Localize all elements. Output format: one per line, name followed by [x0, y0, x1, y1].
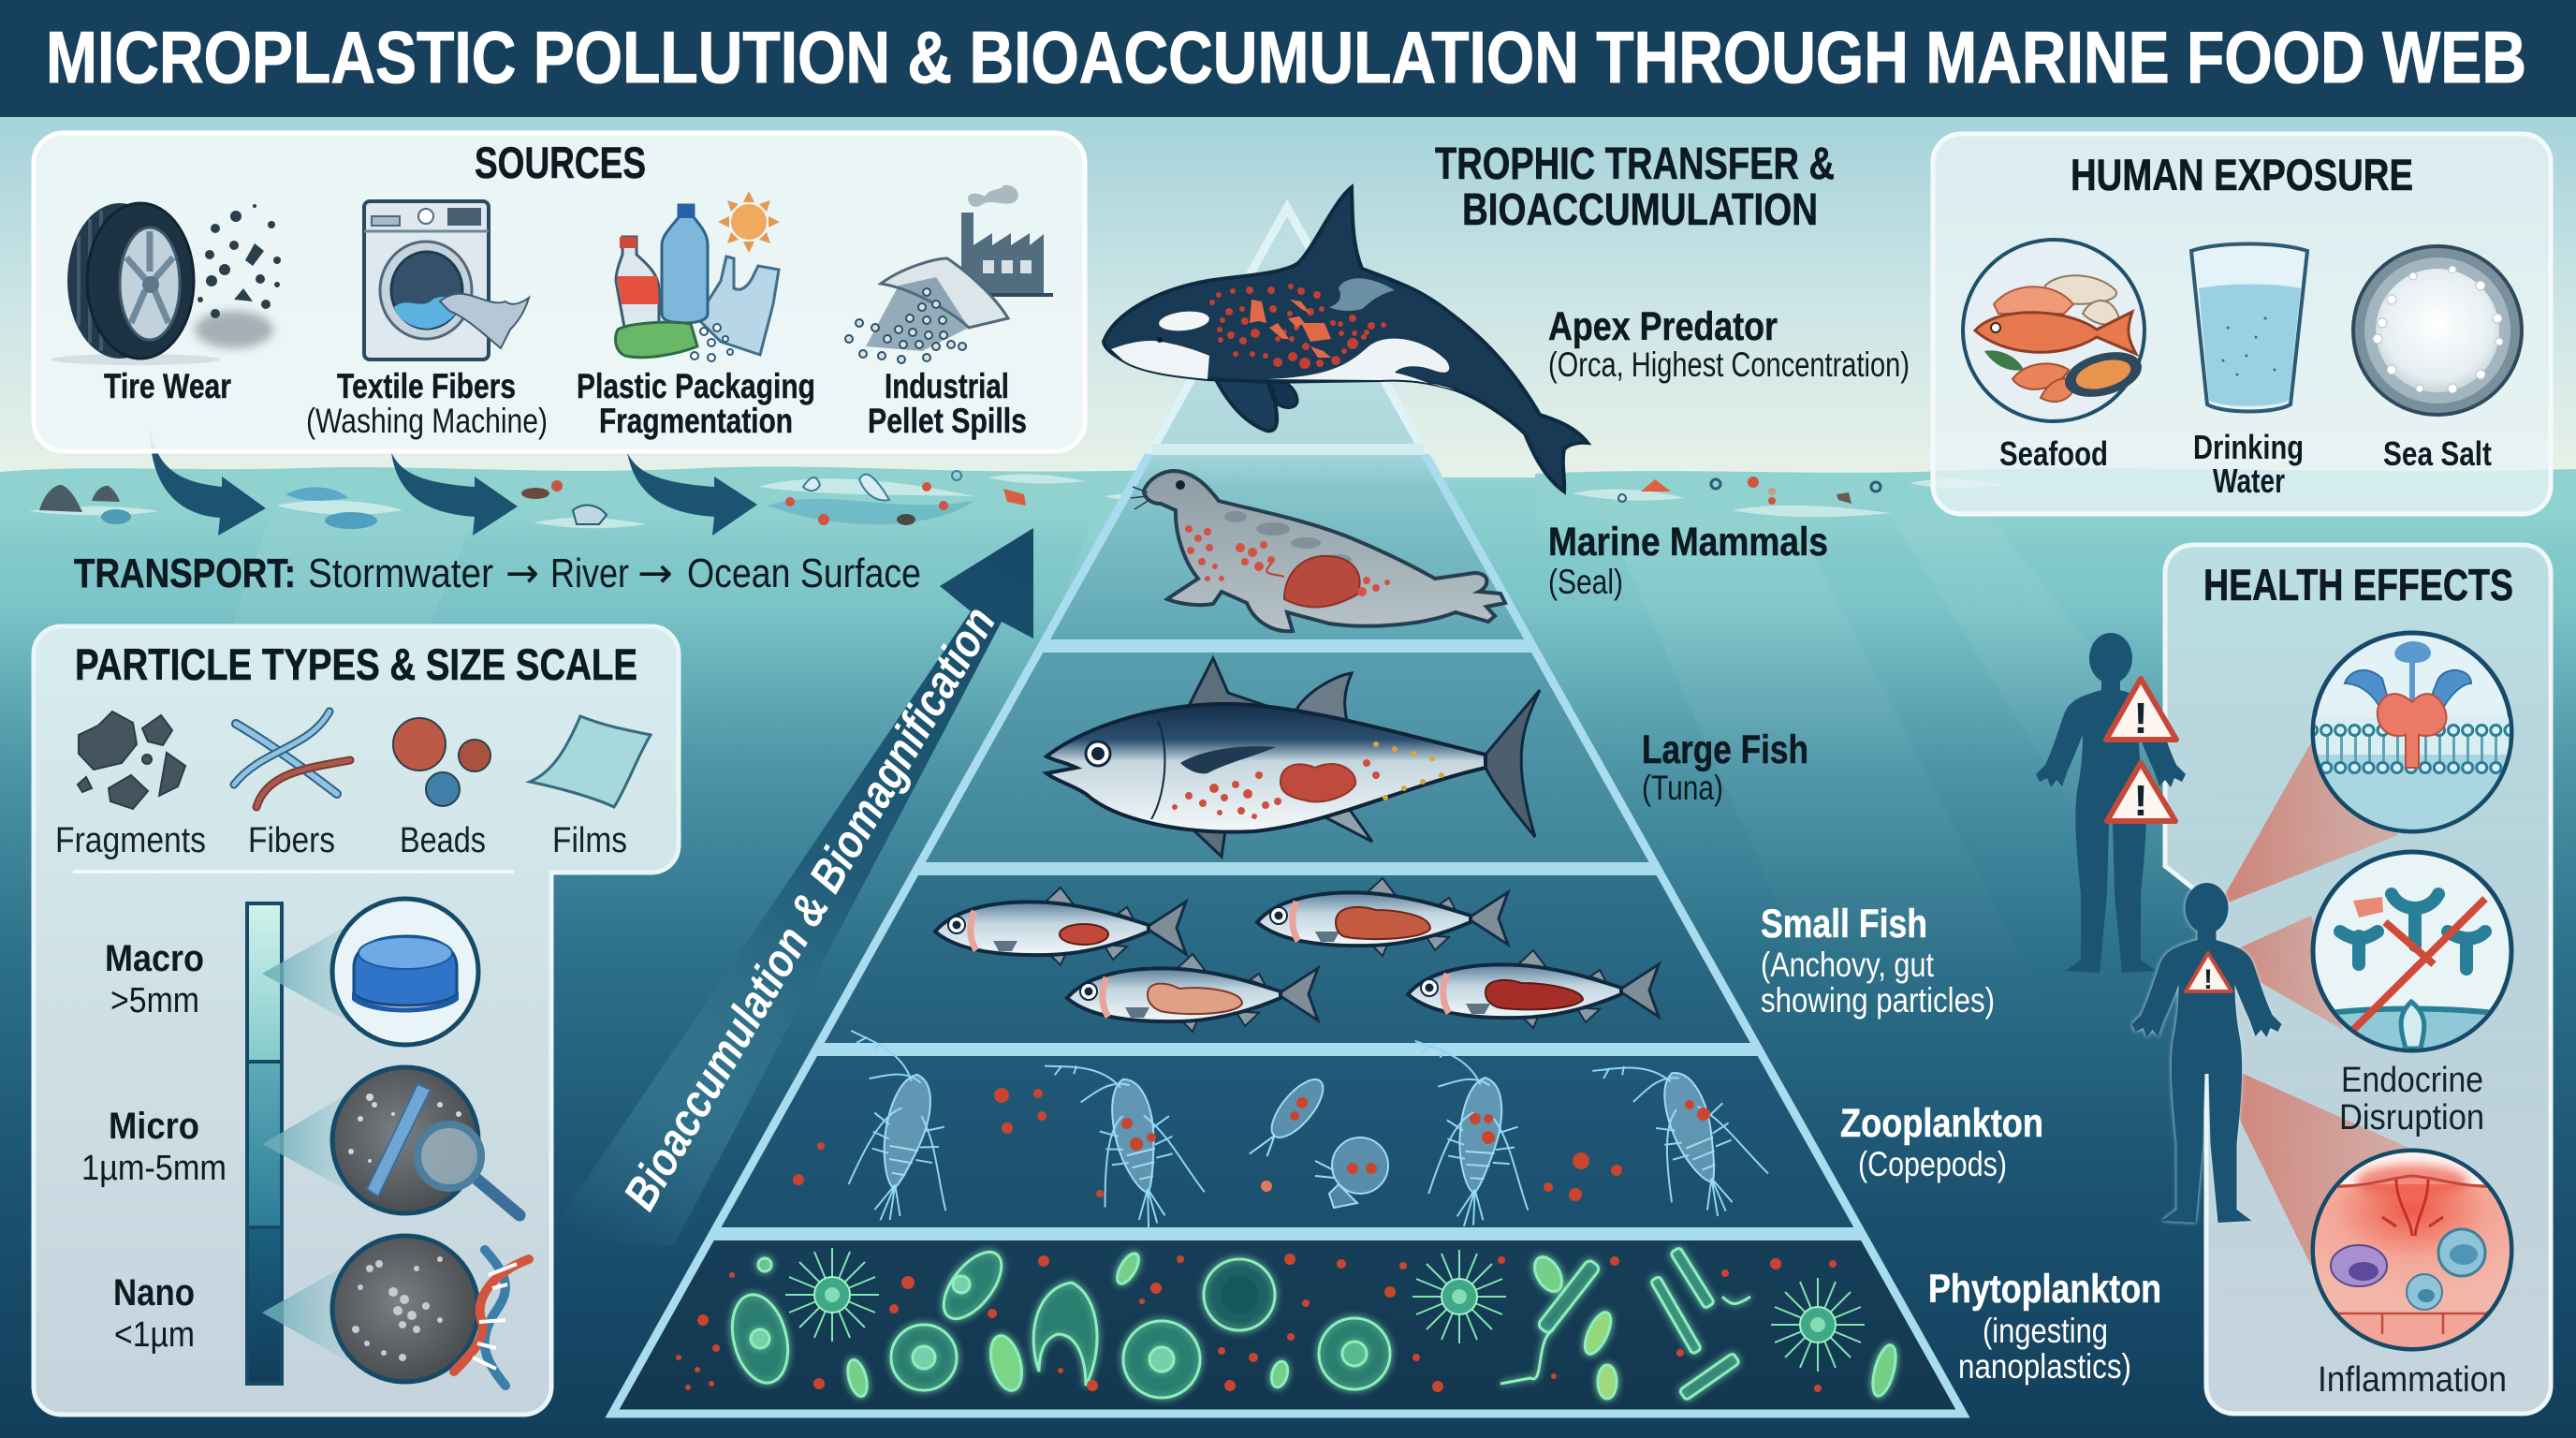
label: drinking water: Drinking: [2193, 428, 2304, 466]
label: textile fibers: Textile Fibers: [337, 367, 516, 405]
light rays in water: [56, 487, 2321, 1123]
sky background: [0, 112, 2576, 487]
label: drinking water: Water: [2213, 462, 2285, 500]
icon: macro bottle cap: [332, 899, 478, 1045]
label: small fish: showing particles): [1761, 981, 1995, 1020]
label: macro: [105, 938, 204, 1020]
label: sea salt: Sea Salt: [2383, 434, 2492, 473]
illustration: zooplankton: [793, 1024, 1776, 1242]
label: large fish: Large Fish: [1642, 727, 1808, 772]
floating debris left: [39, 471, 1026, 529]
labels: particle types: Beads: [400, 821, 486, 860]
label: zooplankton: Zooplankton: [1840, 1101, 2043, 1146]
label: phytoplankton: Phytoplankton: [1928, 1267, 2161, 1312]
arrow: bioaccumulation and biomagnification: Bioaccumulation & Biomagnification: [613, 598, 1005, 1219]
label: apex predator: Apex Predator: [1548, 304, 1778, 349]
icon: warning triangle: !: [2133, 694, 2148, 742]
callout cones: [262, 925, 348, 1361]
human figure with affected organs: [2132, 742, 2415, 1266]
label: textile fibers: (Washing Machine): [306, 402, 548, 440]
label: large fish: [1642, 727, 1808, 807]
icon: warning triangle: !: [2203, 964, 2213, 995]
icon: warning triangle: [2107, 763, 2175, 825]
illustration: orca: [1104, 187, 1588, 492]
icon: seafood plate: [1963, 240, 2146, 421]
icon: cell membrane receptor: [2312, 633, 2512, 833]
panel: particle types and size scale: [34, 626, 679, 1415]
labels: particle types: Fragments: [55, 821, 206, 860]
label: macro: Macro: [105, 938, 204, 979]
icon: washing machine: [364, 201, 529, 360]
label: plastic packaging: Fragmentation: [599, 402, 793, 440]
panel: health effects: [2165, 545, 2551, 1414]
label: small fish: Small Fish: [1761, 902, 1927, 946]
label: nano: <1µm: [114, 1315, 195, 1355]
label: nano: Nano: [113, 1272, 195, 1313]
size scale bar: [247, 903, 282, 1384]
label: small fish: [1761, 902, 1995, 1020]
label: large fish: (Tuna): [1642, 769, 1723, 807]
label: textile fibers: [306, 367, 548, 440]
icon: warning triangle: !: [2133, 776, 2148, 825]
label: zooplankton: [1840, 1101, 2043, 1183]
icon: fragments: [78, 712, 185, 809]
label: endocrine disruption: Disruption: [2339, 1098, 2484, 1137]
transport text: TRANSPORT:: [74, 550, 296, 596]
label: apex predator: (Orca, Highest Concentration): [1548, 345, 1910, 384]
label: phytoplankton: (ingesting: [1983, 1312, 2108, 1350]
panel: sources: [34, 133, 1085, 451]
transport text: River: [550, 550, 629, 596]
icon: sea salt dish: [2353, 246, 2522, 415]
illustration: small fish with particles in gut: [935, 878, 1659, 1032]
icon: factory and pellet spill: [845, 185, 1053, 363]
icon: nano particles with DNA: [332, 1236, 529, 1386]
icon: drinking water glass: [2191, 243, 2307, 412]
label: small fish: (Anchovy, gut: [1761, 946, 1935, 984]
transport text: →: [505, 550, 539, 597]
heading: human exposure: HUMAN EXPOSURE: [2071, 150, 2413, 199]
label: nano: [113, 1272, 195, 1355]
label: industrial pellet spills: Industrial: [885, 367, 1009, 405]
icon: film: [530, 716, 651, 807]
label: marine mammals: (Seal): [1548, 563, 1623, 601]
label: micro: Micro: [109, 1106, 199, 1147]
icon: micro fiber with magnifier: [332, 1067, 520, 1215]
label: endocrine disruption: Endocrine: [2341, 1061, 2483, 1100]
water surface: [0, 466, 2576, 543]
floating debris right: [1618, 477, 1881, 505]
heading: sources: SOURCES: [475, 138, 646, 187]
label: tire wear: Tire Wear: [104, 367, 231, 405]
label: drinking water: [2193, 428, 2304, 500]
panel: human exposure: [1933, 134, 2551, 514]
labels: particle types: Fibers: [248, 821, 335, 860]
ocean background: [0, 477, 2576, 1438]
label: macro: >5mm: [110, 981, 199, 1020]
icon: beads: [393, 718, 490, 806]
icon: fibers: [234, 712, 350, 807]
label: micro: 1µm-5mm: [81, 1149, 227, 1188]
arrows: transport from sources to water: [150, 428, 757, 536]
label: seafood: Seafood: [1999, 434, 2108, 473]
icon: warning triangle: [2106, 679, 2176, 742]
transport text: Stormwater: [308, 550, 493, 596]
label: industrial pellet spills: [868, 367, 1027, 440]
icon: warning triangle: [2186, 953, 2232, 995]
icon: tire wear: [51, 203, 281, 365]
label: plastic packaging: [577, 367, 815, 440]
label: micro: [81, 1106, 227, 1188]
heading: particle types: PARTICLE TYPES & SIZE SCALE: [75, 639, 637, 689]
label: phytoplankton: nanoplastics): [1958, 1347, 2131, 1386]
human figure with warning signs: [2036, 633, 2186, 973]
label: marine mammals: [1548, 520, 1828, 601]
label: industrial pellet spills: Pellet Spills: [868, 402, 1027, 440]
label: endocrine disruption: [2339, 1061, 2484, 1137]
icon: plastic packaging: [616, 191, 780, 361]
icon: inflammation tissue: [2312, 1147, 2512, 1353]
heading: trophic transfer: BIOACCUMULATION: [1462, 185, 1818, 235]
icon: blocked receptors: [2312, 852, 2512, 1058]
label: inflammation: Inflammation: [2318, 1360, 2507, 1400]
label: apex predator: [1548, 304, 1910, 384]
label: marine mammals: Marine Mammals: [1548, 520, 1828, 565]
illustration: seal: [1131, 471, 1505, 631]
title bar: [0, 0, 2576, 117]
transport text: →: [637, 550, 673, 597]
label: plastic packaging: Plastic Packaging: [577, 367, 815, 405]
illustration: phytoplankton: [676, 1242, 1900, 1401]
heading: trophic transfer: TROPHIC TRANSFER &: [1435, 139, 1835, 189]
transport text: Ocean Surface: [687, 550, 921, 596]
label: zooplankton: (Copepods): [1858, 1145, 2007, 1183]
transport text: [74, 550, 921, 597]
pyramid: trophic levels: [612, 208, 1963, 1414]
labels: particle types: [55, 821, 627, 860]
label: phytoplankton: [1928, 1267, 2161, 1386]
illustration: tuna: [1046, 658, 1540, 857]
heading: trophic transfer: [1435, 139, 1835, 235]
labels: particle types: Films: [552, 821, 627, 860]
